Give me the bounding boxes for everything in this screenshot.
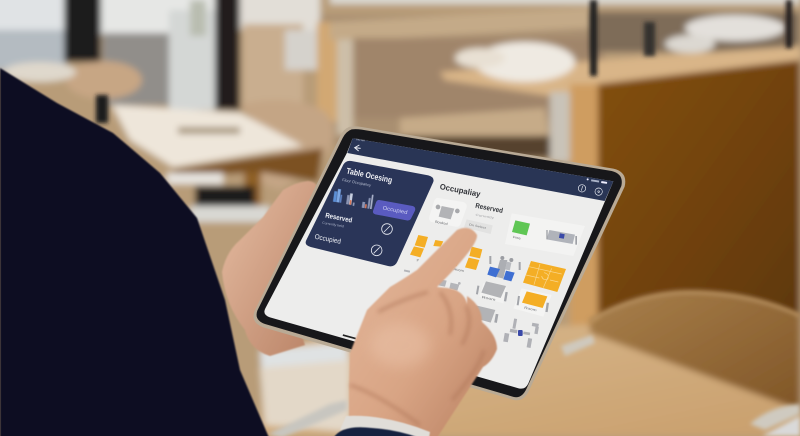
mini bar chart (333, 188, 374, 209)
occupancy heading: Occupaliay (439, 182, 482, 199)
check icon occupied (371, 245, 382, 256)
reserved sublabel: Currently (475, 213, 495, 220)
status bar: 9:41 AM (356, 138, 365, 142)
Reserved sublabel: Currently held (322, 221, 344, 228)
orange tables left (410, 235, 482, 273)
floor plan (404, 198, 585, 348)
panel: table summary (306, 161, 434, 266)
home indicator (343, 334, 356, 339)
Occupied label: Occupied (314, 234, 342, 246)
orange room card: Room (524, 306, 537, 312)
knuckle shading (350, 292, 484, 425)
grey table partly hidden (472, 305, 498, 323)
blue seat table (487, 256, 521, 281)
card: free table: Free (512, 235, 521, 241)
hand highlight (370, 323, 430, 367)
shirt cuff (340, 416, 430, 436)
small grey tables (404, 269, 461, 291)
small plan with blue seat (503, 319, 539, 348)
card: table one: Booked (435, 220, 448, 226)
jacket sleeve (332, 427, 425, 436)
large orange floor plan (523, 261, 566, 292)
left hand holding the tablet (222, 181, 318, 356)
right hand pointing at the tablet (349, 228, 497, 436)
settings icon (595, 188, 602, 195)
orange tables left: P (417, 259, 420, 263)
app header bar (347, 138, 613, 201)
tablet (253, 126, 625, 400)
person's dark jacket (0, 68, 270, 436)
panel title: Table Ocesing (346, 166, 393, 185)
panel subtitle: Floor Occupancy (342, 177, 372, 188)
select chip: On Select (468, 222, 486, 230)
back arrow (355, 145, 361, 151)
orange tables left: Room (453, 267, 465, 273)
table with blue seat (546, 230, 577, 245)
status icons (587, 178, 607, 184)
info icon (578, 185, 586, 192)
select chip (464, 219, 493, 234)
check icon reserved (382, 224, 392, 234)
reserved label: Reserved (475, 203, 503, 215)
tablet bezel (257, 129, 622, 397)
button: Occupied (382, 205, 408, 216)
Reserved label: Reserved (325, 212, 353, 225)
small room cards: Room (481, 295, 496, 302)
screen (264, 138, 613, 389)
card: table one (429, 198, 467, 227)
card: free table (505, 213, 585, 256)
orange room card (513, 288, 552, 317)
tablet body (253, 126, 625, 400)
small room cards (476, 281, 508, 303)
